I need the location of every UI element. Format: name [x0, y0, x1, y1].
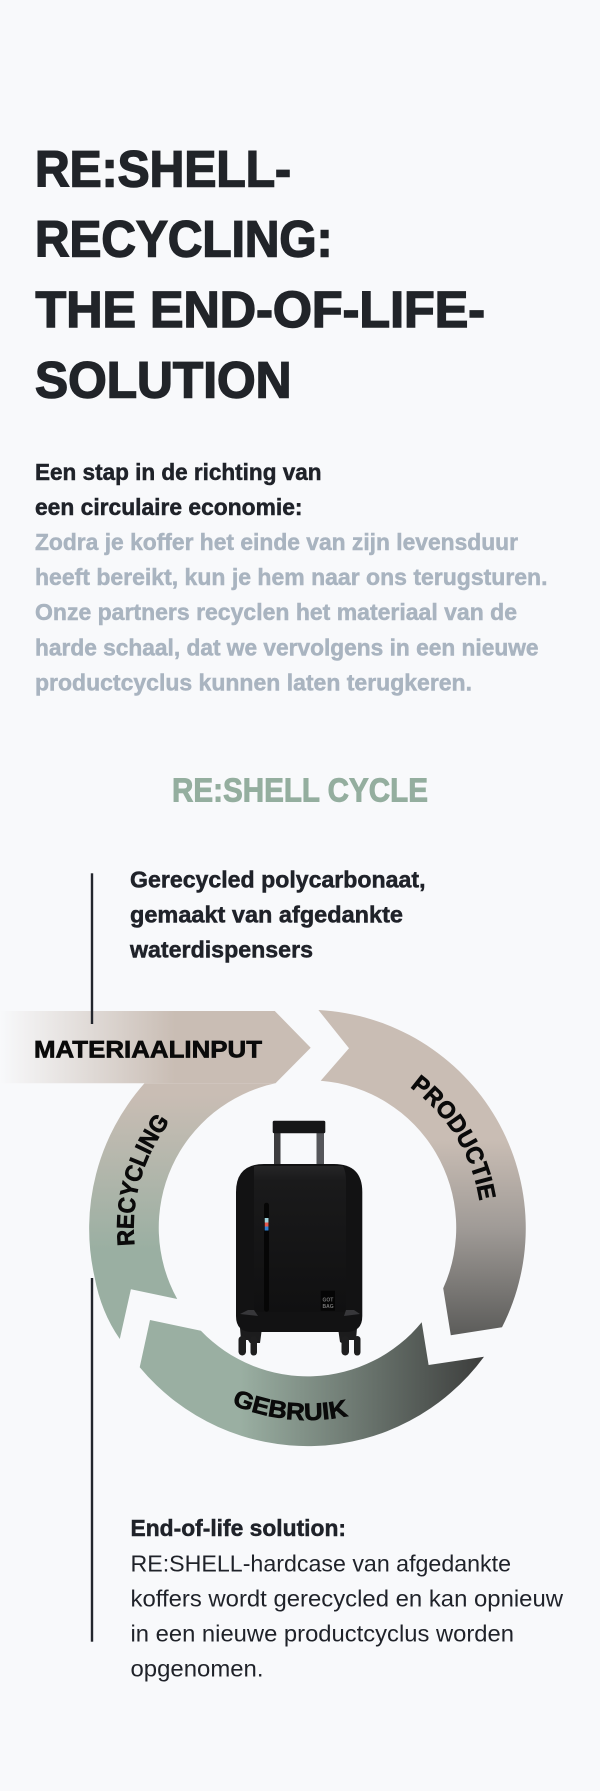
arrow: recycling: [89, 1083, 275, 1339]
intro heading: [35, 459, 322, 520]
arrow: material input: MATERIAALINPUT: [34, 1036, 262, 1063]
intro paragraph: [35, 529, 548, 696]
callout: material input: Gerecycled polycarbonaat,: [130, 867, 426, 893]
intro paragraph: Zodra je koffer het einde van zijn levensduur: [35, 529, 518, 555]
cycle heading: RE:SHELL CYCLE: [172, 772, 428, 808]
callout: end-of-life solution: [130, 1515, 564, 1682]
end-of-life paragraph: opgenomen.: [130, 1656, 264, 1682]
title: [35, 141, 485, 408]
intro paragraph: harde schaal, dat we vervolgens in een nieuwe: [35, 635, 538, 661]
intro text block: [35, 459, 548, 696]
arrow: production: [318, 1010, 526, 1336]
intro paragraph: heeft bereikt, kun je hem naar ons terugsturen.: [35, 564, 548, 590]
title: SOLUTION: [35, 351, 292, 408]
callout: material input: [129, 867, 426, 963]
intro paragraph: Onze partners recyclen het materiaal van de: [35, 599, 517, 625]
title: RECYCLING:: [35, 211, 332, 268]
arrow: use: GEBRUIK: [234, 1391, 349, 1421]
title: RE:SHELL-: [35, 141, 291, 198]
icon: black suitcase: GOT: [322, 1298, 333, 1304]
title: THE END-OF-LIFE-: [36, 281, 485, 338]
callout line: end of life: [91, 1278, 93, 1642]
callout: material input: waterdispensers: [129, 937, 313, 963]
arrow: material input: [0, 1011, 311, 1083]
callout: material input: gemaakt van afgedankte: [130, 902, 403, 928]
end-of-life paragraph: [130, 1551, 564, 1682]
cycle diagram: [20, 1010, 526, 1446]
end-of-life paragraph: RE:SHELL-hardcase van afgedankte: [130, 1551, 511, 1577]
end-of-life paragraph: koffers wordt gerecycled en kan opnieuw: [130, 1586, 564, 1612]
intro heading: een circulaire economie:: [35, 494, 302, 520]
arrow: use: [140, 1320, 484, 1446]
end-of-life heading: End-of-life solution:: [130, 1515, 346, 1541]
arrow: recycling: RECYCLING: [116, 1115, 168, 1246]
intro paragraph: productcyclus kunnen laten terugkeren.: [35, 670, 472, 696]
intro heading: Een stap in de richting van: [35, 459, 322, 485]
callout line: material input: [91, 873, 93, 1024]
icon: black suitcase: [236, 1121, 362, 1356]
end-of-life paragraph: in een nieuwe productcyclus worden: [130, 1621, 514, 1647]
icon: black suitcase: BAG: [322, 1304, 334, 1310]
arrow: production: PRODUCTIE: [410, 1074, 496, 1200]
